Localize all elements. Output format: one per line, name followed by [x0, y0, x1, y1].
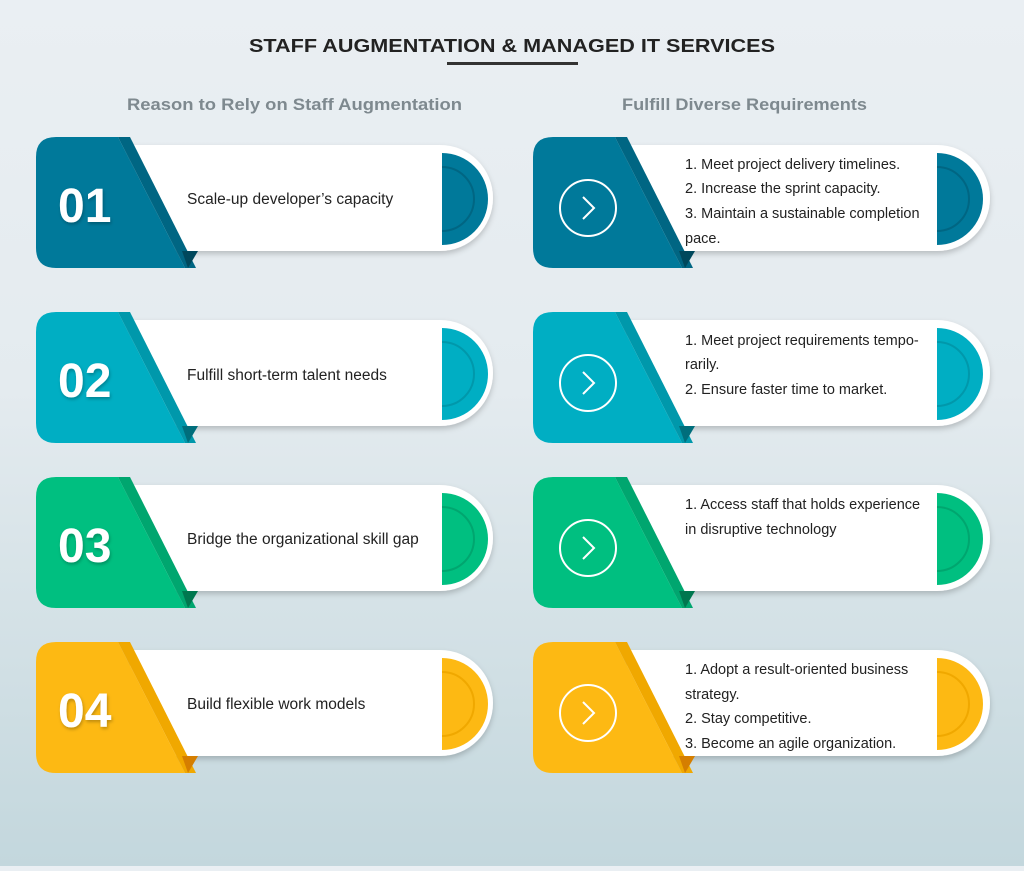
requirement card 3: [533, 477, 990, 608]
card 01: [36, 137, 493, 268]
requirement card 2: 1. Meet project requirements tempo-: [685, 333, 919, 349]
requirement card 2: rarily.: [685, 357, 719, 373]
requirement card 1: [533, 137, 990, 268]
requirement card 1: 2. Increase the sprint capacity.: [685, 181, 881, 197]
card 01: Scale-up developer’s capacity: [187, 191, 393, 208]
requirement card 4: strategy.: [685, 687, 740, 703]
card 02: Fulfill short-term talent needs: [187, 367, 387, 384]
requirement card 1: pace.: [685, 231, 720, 247]
requirement card 3: 1. Access staff that holds experience: [685, 497, 920, 513]
requirement card 4: 3. Become an agile organization.: [685, 736, 896, 752]
card 01: 01: [58, 180, 111, 233]
requirement card 2: 2. Ensure faster time to market.: [685, 382, 887, 398]
subheading left: Reason to Rely on Staff Augmentation: [127, 95, 462, 114]
card 02: [36, 312, 493, 443]
card 03: 03: [58, 520, 111, 573]
card 04: 04: [58, 685, 112, 738]
requirement card 4: [533, 642, 990, 773]
card 03: Bridge the organizational skill gap: [187, 531, 419, 548]
requirement card 4: 2. Stay competitive.: [685, 711, 812, 727]
requirement card 4: 1. Adopt a result-oriented business: [685, 662, 908, 678]
card 04: [36, 642, 493, 773]
card 04: Build flexible work models: [187, 696, 366, 713]
card 03: [36, 477, 493, 608]
requirement card 2: [533, 312, 990, 443]
requirement card 1: 1. Meet project delivery timelines.: [685, 157, 900, 173]
card 02: 02: [58, 355, 111, 408]
title: STAFF AUGMENTATION & MANAGED IT SERVICES: [249, 36, 775, 56]
requirement card 1: 3. Maintain a sustainable completion: [685, 206, 920, 222]
subheading right: Fulfill Diverse Requirements: [622, 95, 867, 114]
requirement card 3: in disruptive technology: [685, 522, 837, 538]
